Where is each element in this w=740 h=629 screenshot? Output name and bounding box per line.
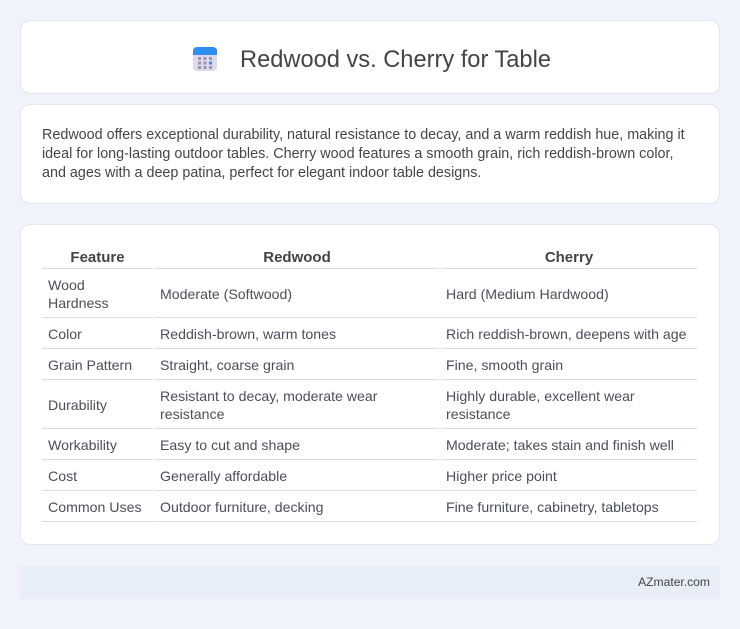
row: color: Color	[48, 326, 82, 342]
comparison table: Generally affordable	[160, 468, 287, 484]
comparison table: Moderate (Softwood)	[160, 286, 292, 302]
comparison table: Rich reddish-brown, deepens with age	[446, 326, 687, 342]
header: Feature: Feature	[70, 249, 125, 266]
comparison table: Easy to cut and shape	[160, 437, 300, 453]
comparison table: Hard (Medium Hardwood)	[446, 286, 609, 302]
title card	[20, 20, 720, 94]
header: Redwood: Redwood	[263, 249, 331, 266]
comparison table: resistance	[446, 406, 510, 422]
comparison table: Moderate; takes stain and finish well	[446, 437, 674, 453]
comparison table: Fine, smooth grain	[446, 357, 563, 373]
row: wood hardness	[48, 277, 109, 311]
intro text: ideal for long-lasting outdoor tables. Cherry wood features a smooth grain, rich reddish-brown color,	[42, 146, 673, 162]
heading: Redwood vs. Cherry for Table	[240, 47, 551, 73]
intro text: Redwood offers exceptional durability, natural resistance to decay, and a warm reddish hue, making it	[42, 127, 685, 143]
comparison table: Highly durable, excellent wear	[446, 388, 635, 404]
comparison table: Outdoor furniture, decking	[160, 499, 324, 515]
comparison table: Higher price point	[446, 468, 557, 484]
intro text: and ages with a deep patina, perfect for elegant indoor table designs.	[42, 165, 481, 181]
row: grain pattern: Grain Pattern	[48, 357, 132, 373]
row: wood hardness: Hardness	[48, 295, 109, 311]
row: common uses: Common Uses	[48, 499, 142, 515]
row: workability: Workability	[48, 437, 117, 453]
table panel	[20, 224, 720, 545]
row: wood hardness: Wood	[48, 277, 85, 293]
comparison table: resistance	[160, 406, 224, 422]
comparison table: Resistant to decay, moderate wear	[160, 388, 377, 404]
footer brand: AZmater.com	[638, 575, 710, 589]
comparison table: Straight, coarse grain	[160, 357, 294, 373]
icon: calendar	[193, 47, 217, 71]
footer bar	[20, 566, 720, 599]
row: cost: Cost	[48, 468, 77, 484]
header: Cherry: Cherry	[545, 249, 593, 266]
intro text	[42, 127, 685, 181]
intro panel	[20, 104, 720, 204]
comparison table: Reddish-brown, warm tones	[160, 326, 336, 342]
row: durability: Durability	[48, 397, 107, 413]
comparison table: Fine furniture, cabinetry, tabletops	[446, 499, 659, 515]
